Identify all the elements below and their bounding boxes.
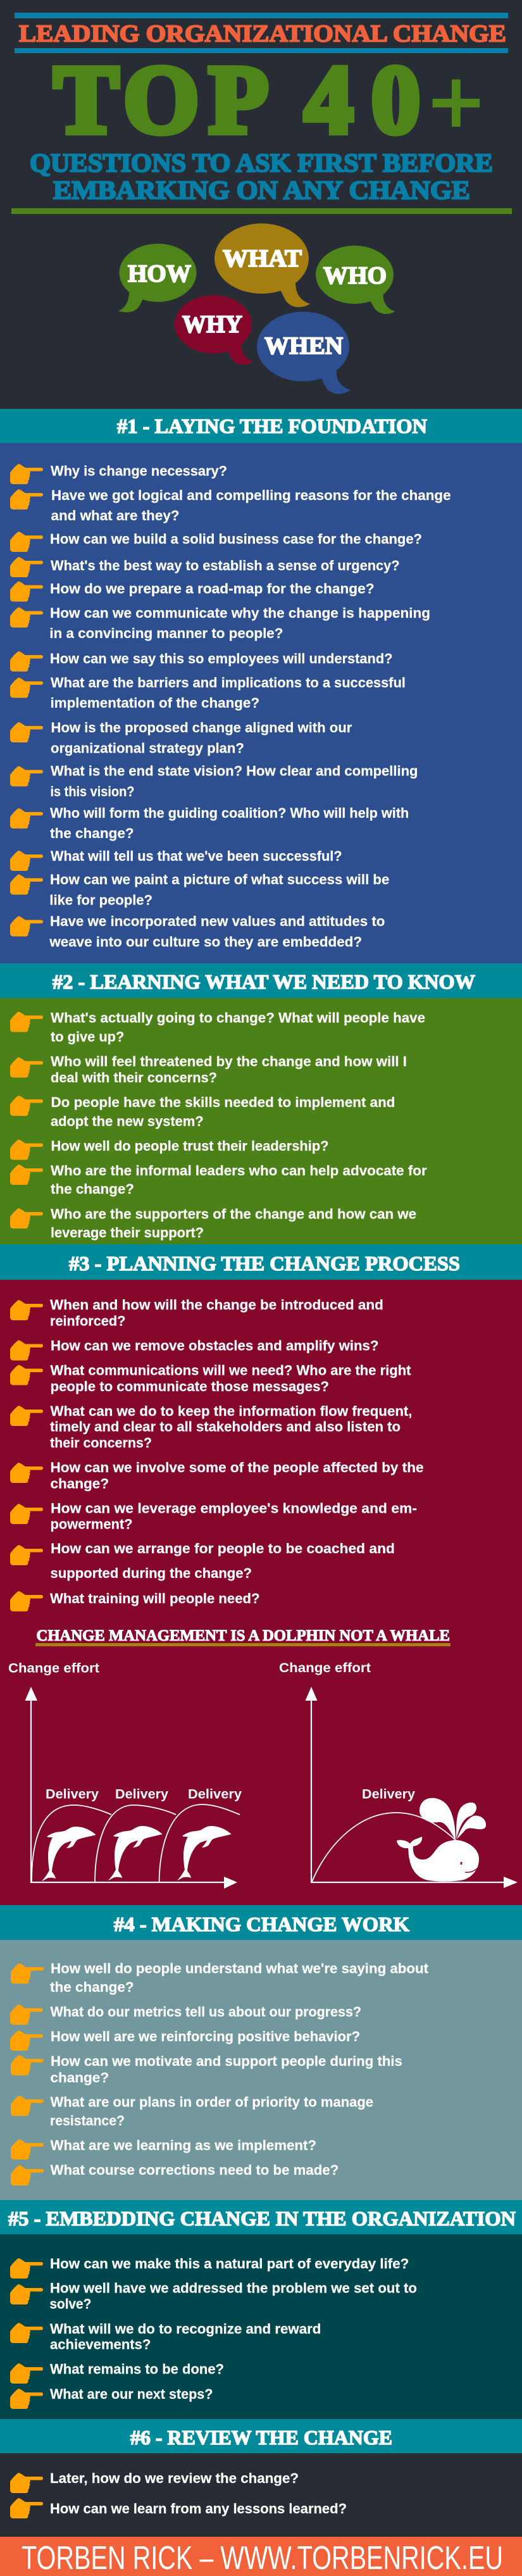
question 9: organizational strategy plan? [51,741,244,756]
section 4 header band [0,1905,522,1940]
question 3: What communications will we need? Who are the right [51,1362,411,1379]
question 4: change? [51,2070,109,2085]
delivery label 1: Delivery [46,1787,99,1801]
icon: hand 13 [10,875,43,895]
bubble: how [118,244,196,312]
bubble: who: WHO [323,262,387,289]
main title: + [428,49,484,157]
question 10: What is the end state vision? How clear and compelling [51,763,418,778]
question 4: What's the best way to establish a sense of urgency? [51,558,400,573]
question 4: How can we motivate and support people during this [51,2053,402,2069]
question 3: How can we build a solid business case for the change? [50,531,422,547]
section 3 header band [0,1244,522,1280]
question 6: How can we leverage employee's knowledge and em- [51,1500,417,1516]
icon: hand 1 [10,464,43,484]
icon: hand 6 [10,1208,43,1229]
question 1: When and how will the change be introduced and [50,1297,383,1313]
icon: dolphin 2 [108,1826,163,1880]
section 3 heading: #3 - PLANNING THE CHANGE PROCESS [69,1252,460,1275]
icon: dolphin 1 [42,1827,96,1881]
icon: hand 2 [10,1341,43,1361]
question 14: Have we incorporated new values and attitudes to [50,913,385,929]
icon: hand 3 [10,1365,43,1385]
question 6: Who are the supporters of the change and how can we [51,1206,416,1222]
question 5: resistance? [50,2113,125,2129]
question 11: the change? [50,825,134,841]
icon: hand 6 [10,1504,43,1524]
question 2 [51,487,451,523]
question 5: change? [51,1476,109,1491]
icon: hand 4 [10,557,43,577]
panel: section 1 laying the foundation [0,409,522,963]
question 4: timely and clear to all stakeholders and also listen to [50,1419,401,1434]
question 6 [51,1206,416,1241]
question 2: How well have we addressed the problem we set out to [50,2280,417,2296]
question 2 [51,1053,407,1085]
question 3: achievements? [50,2337,151,2352]
bubble: how: HOW [128,260,191,287]
question 1: to give up? [51,1029,124,1044]
icon: hand 5 [10,1165,43,1185]
icon: hand 8 [10,677,43,697]
question 2: How can we learn from any lessons learned? [50,2501,347,2517]
question 2: Have we got logical and compelling reasons for the change [51,487,451,503]
delivery curve [312,1813,456,1882]
question 2: What do our metrics tell us about our progress? [51,2004,361,2020]
icon: hand 5 [10,2389,43,2409]
question 10 [51,763,418,799]
section 1 header band [0,409,522,443]
question 8: What training will people need? [50,1591,259,1606]
subtitle [30,148,493,204]
second rule [15,48,508,53]
question 7: What course corrections need to be made? [51,2162,339,2178]
question 5 [50,2094,373,2129]
question 8: What are the barriers and implications to a successful [51,675,406,691]
question 14: weave into our culture so they are embedded? [49,934,362,949]
section 5 heading: #5 - EMBEDDING CHANGE IN THE ORGANIZATION [8,2207,516,2230]
question 6 [49,605,430,641]
y-axis label: Change effort [8,1661,99,1676]
question 12: What will tell us that we've been successful? [51,848,342,864]
section 6 header band [0,2419,522,2453]
question 3 [51,1362,411,1394]
question 5: What are our plans in order of priority to manage [51,2094,373,2110]
section 1 heading: #1 - LAYING THE FOUNDATION [117,415,427,437]
icon: hand 14 [10,916,43,937]
question 2: How can we remove obstacles and amplify wins? [51,1338,378,1353]
question 7: How can we say this so employees will understand? [50,651,392,666]
question 4 [50,1403,412,1451]
question 5: How do we prepare a road-map for the change? [50,581,375,596]
chart: whale [279,1661,518,1888]
question 1: How well do people understand what we're saying about [51,1961,429,1976]
delivery label 3: Delivery [188,1787,242,1801]
question 5: What are our next steps? [50,2386,213,2402]
question 6: How can we communicate why the change is happening [50,605,430,621]
question 6: What are we learning as we implement? [51,2137,316,2153]
bubble: what [214,223,310,307]
icon: whale [397,1798,486,1882]
question 4: their concerns? [50,1435,152,1451]
kicker title: LEADING ORGANIZATIONAL CHANGE [19,20,506,47]
question 9: How is the proposed change aligned with our [51,720,352,735]
question 1: What's actually going to change? What will people have [51,1010,425,1025]
question 4: What can we do to keep the information flow frequent, [51,1403,412,1419]
panel: section 4 making change work [0,1905,522,2200]
question 2: solve? [49,2296,91,2311]
question 13: like for people? [49,892,152,908]
section 2 header band [0,963,522,998]
question 3: adopt the new system? [51,1113,204,1129]
question 11 [50,805,409,841]
question 11: Who will form the guiding coalition? Who will help with [50,805,409,821]
icon: hand 10 [10,766,43,786]
top rule [15,13,508,18]
question 5 [51,1163,427,1197]
question 1 [50,1297,383,1329]
icon: hand 4 [11,2055,44,2075]
section 4 body [0,1940,522,2200]
question 1: the change? [50,1979,134,1995]
subtitle: QUESTIONS TO ASK FIRST BEFORE [30,148,493,177]
bubble: what: WHAT [223,245,302,272]
icon: hand 5 [11,2096,44,2116]
icon: hand 12 [10,851,43,871]
delivery label 2: Delivery [115,1787,168,1801]
question 4 [51,2053,402,2085]
icon: hand 2 [10,2004,43,2025]
question 2: deal with their concerns? [51,1070,217,1085]
icon: hand 11 [10,808,43,828]
bubble: when [257,311,351,394]
question 9 [51,720,352,756]
subtitle: EMBARKING ON ANY CHANGE [53,175,470,204]
icon: hand 1 [10,2258,43,2279]
question 5 [51,1460,424,1491]
heading underline [35,1643,451,1646]
question 6: powerment? [51,1516,133,1532]
panel: section 2 learning what we need to know [0,963,522,1244]
icon: hand 7 [10,651,43,672]
bubble: why [175,295,253,365]
section 6 heading: #6 - REVIEW THE CHANGE [130,2426,392,2449]
main title: TOP 40 [54,46,420,154]
question 1: Why is change necessary? [51,463,227,478]
section 3 body [0,1280,522,1905]
question 3: Do people have the skills needed to implement and [51,1094,395,1110]
icon: hand 7 [11,2165,44,2185]
icon: hand 2 [10,2284,43,2304]
question 6 [51,1500,417,1532]
icon: hand 1 [10,1011,43,1032]
icon: hand 6 [11,2139,44,2160]
question 4: What remains to be done? [50,2361,224,2377]
section 1 body [0,443,522,963]
question 6: leverage their support? [51,1225,204,1241]
question 8 [51,675,406,711]
section 6 body [0,2453,522,2537]
question 1: How can we make this a natural part of everyday life? [50,2256,409,2272]
icon: hand 4 [10,2363,43,2384]
icon: hand 2 [10,2498,43,2518]
question 3: What will we do to recognize and reward [50,2321,321,2337]
question 1 [50,1961,429,1995]
question 13: How can we paint a picture of what success will be [50,872,389,887]
question 1: reinforced? [50,1313,125,1329]
question 13 [49,872,389,908]
icon: hand 4 [10,1406,43,1426]
question 1 [51,1010,425,1044]
question 4: How well do people trust their leadership? [51,1138,329,1154]
icon: hand 9 [10,722,43,742]
question 3 [50,2321,321,2352]
bubble: who [316,246,395,314]
question 5: Who are the informal leaders who can help advocate for [51,1163,427,1179]
bubble: why: WHY [182,311,242,338]
axes [25,1687,237,1889]
bubble: when: WHEN [264,332,343,360]
icon: hand 5 [10,581,43,601]
icon: hand 4 [10,1139,43,1160]
icon: hand 2 [10,1057,43,1077]
icon: hand 3 [10,2323,43,2343]
section 5 body [0,2234,522,2419]
question 1: Later, how do we review the change? [50,2470,299,2486]
question 2: Who will feel threatened by the change and how will I [51,1053,407,1070]
question 3: people to communicate those messages? [51,1379,329,1394]
question 5: How can we involve some of the people affected by the [51,1460,424,1475]
icon: hand 6 [10,608,43,628]
question 10: is this vision? [51,784,134,799]
icon: hand 1 [11,1963,44,1984]
icon: dolphin 3 [177,1826,232,1880]
question 7: supported during the change? [51,1565,252,1581]
icon: hand 3 [10,532,43,552]
delivery curves [32,1804,240,1882]
question 8: implementation of the change? [51,695,259,711]
header block [11,13,512,214]
question 7: How can we arrange for people to be coached and [51,1541,395,1556]
icon: hand 7 [10,1545,43,1565]
question 6: in a convincing manner to people? [49,625,283,641]
axes [305,1687,518,1888]
icon: hand 3 [10,2030,43,2051]
y-axis label: Change effort [279,1661,371,1675]
delivery label: Delivery [362,1787,415,1801]
question 7 [51,1541,395,1581]
icon: hand 1 [10,1300,43,1320]
icon: hand 2 [10,489,43,510]
icon: hand 5 [10,1463,43,1483]
question 3: How well are we reinforcing positive behavior? [51,2029,360,2044]
question 5: the change? [51,1181,134,1197]
question 3 [51,1094,395,1129]
section 2 heading: #2 - LEARNING WHAT WE NEED TO KNOW [53,970,475,993]
chart: dolphin [8,1661,242,1889]
speech bubbles [118,223,395,394]
question 2: and what are they? [51,508,180,523]
section 5 header band [0,2200,522,2234]
dolphin heading: CHANGE MANAGEMENT IS A DOLPHIN NOT A WHALE [37,1627,450,1644]
icon: hand 3 [10,1096,43,1116]
panel: section 6 review the change [0,2419,522,2537]
question 2 [49,2280,417,2311]
section 4 heading: #4 - MAKING CHANGE WORK [114,1913,409,1935]
icon: hand 1 [10,2473,43,2493]
question 14 [49,913,385,949]
icon: hand 8 [10,1591,43,1611]
green rule [11,208,512,214]
panel: section 3 planning the change process [0,1244,522,1905]
section 2 body [0,998,522,1244]
panel: section 5 embedding change [0,2200,522,2419]
